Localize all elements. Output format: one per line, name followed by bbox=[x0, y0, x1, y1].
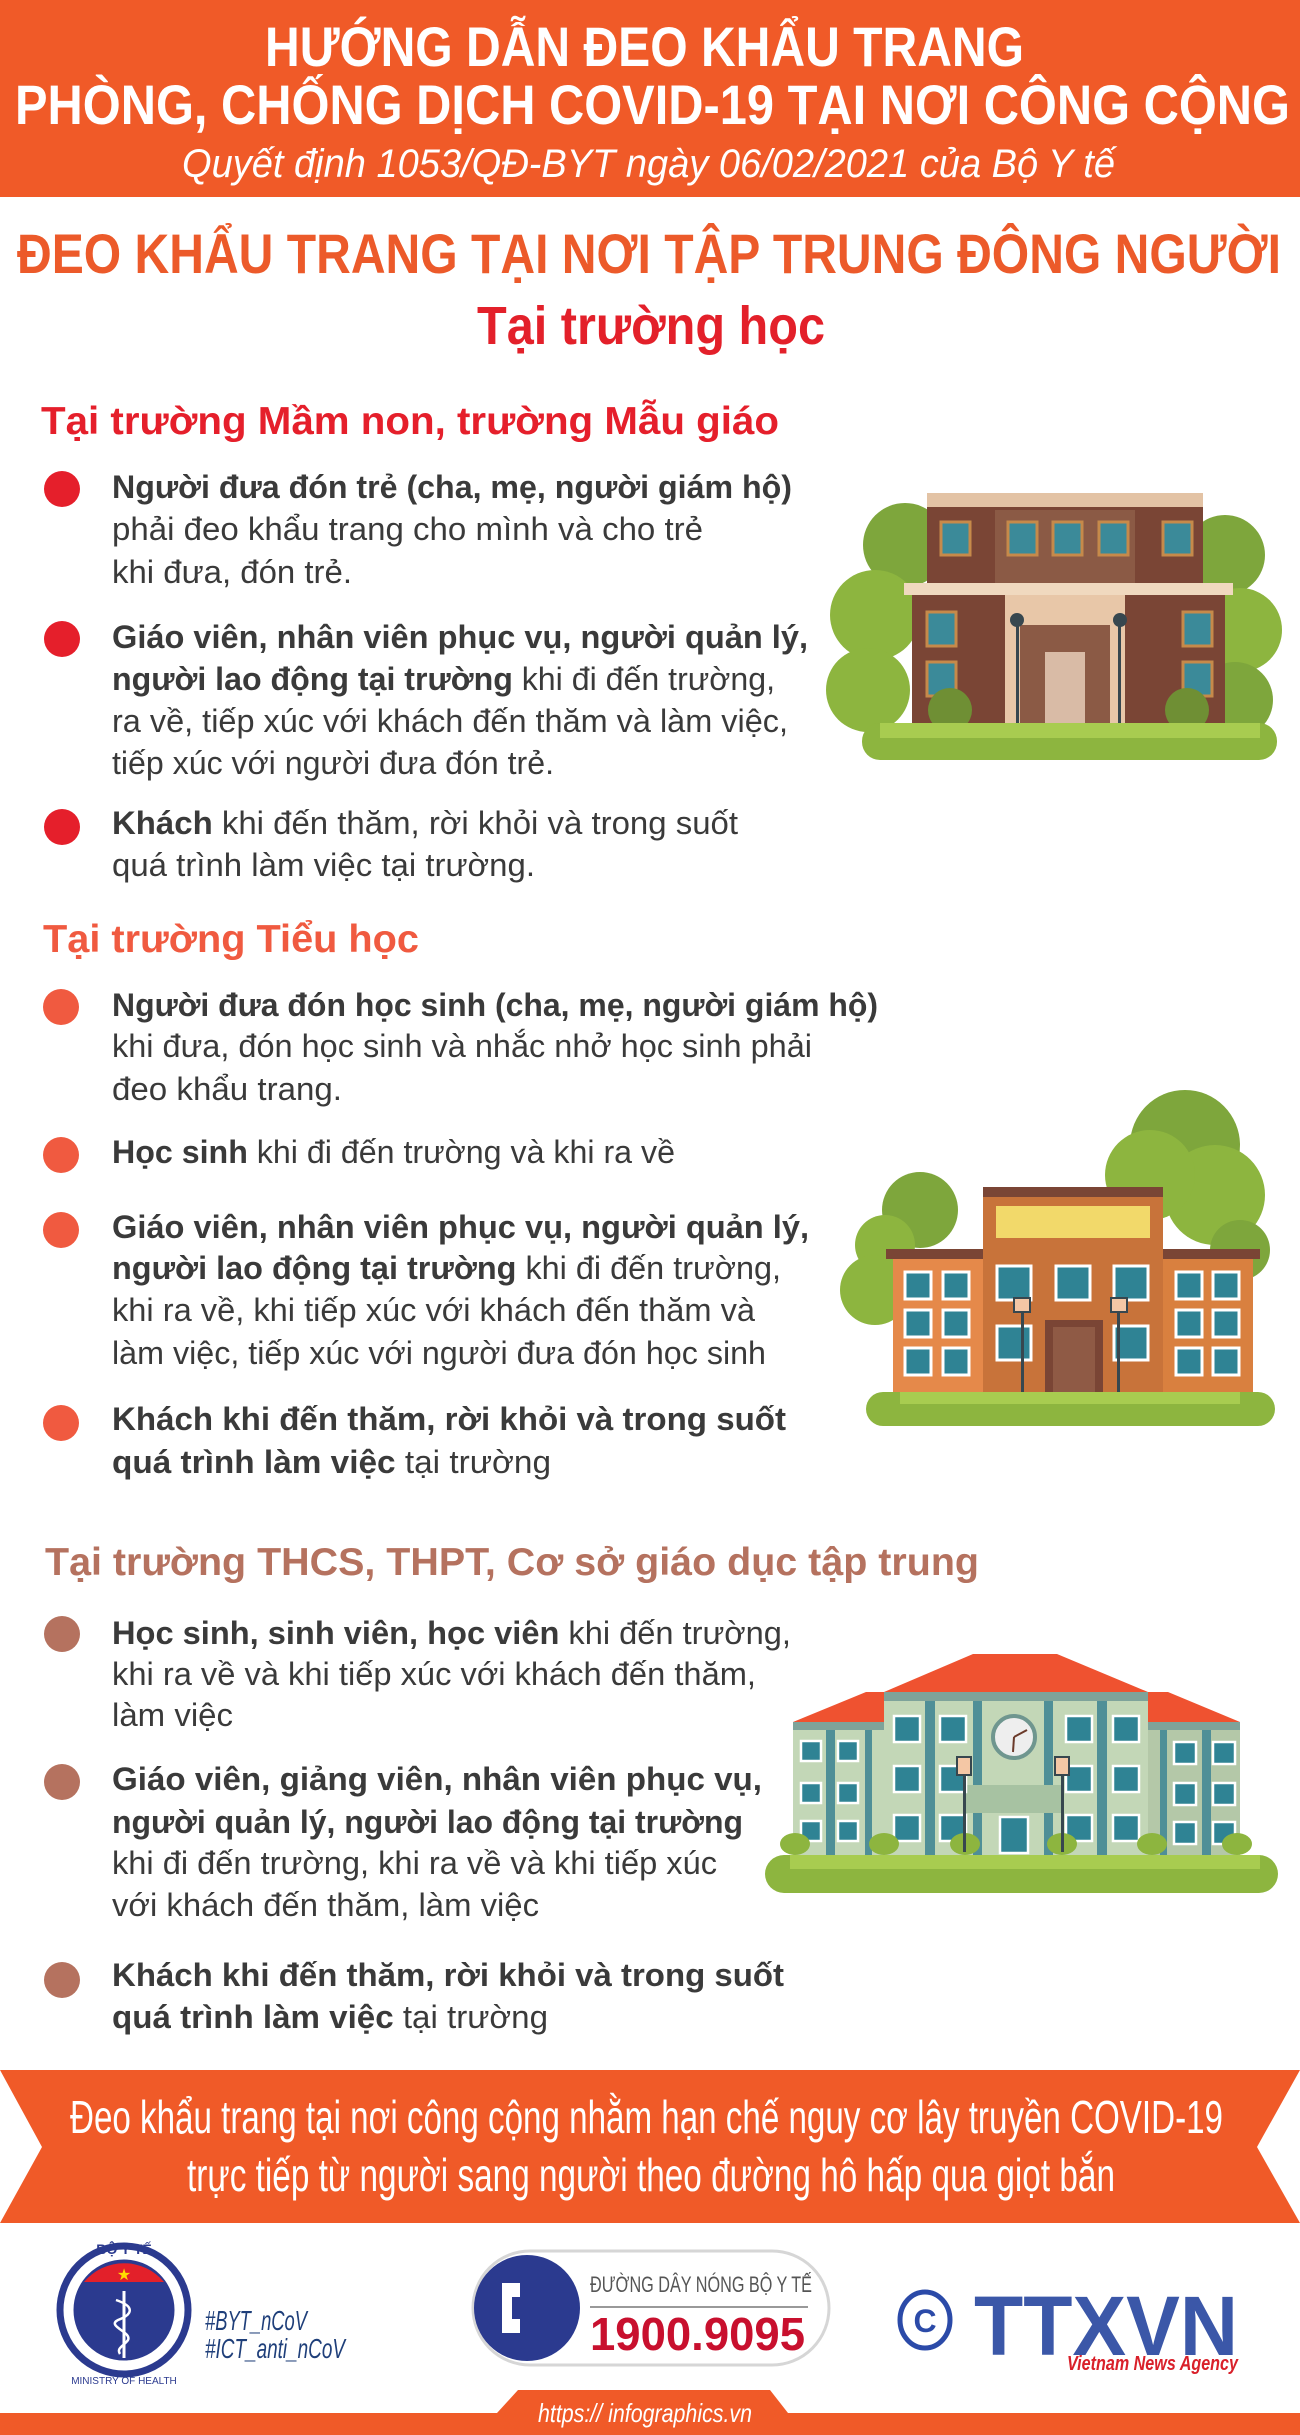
icon: ministry of health logo: MINISTRY OF HEALTH bbox=[71, 2376, 177, 2387]
icon: ministry of health logo: BỘ Y TẾ bbox=[96, 2240, 152, 2257]
bullet 1.3 bbox=[44, 805, 738, 883]
bullet 3.2: Giáo viên, giảng viên, nhân viên phục vụ, bbox=[112, 1761, 762, 1797]
subtitle: Quyết định 1053/QĐ-BYT ngày 06/02/2021 của Bộ Y tế bbox=[182, 142, 1118, 186]
footer bar: https:// infographics.vn bbox=[538, 2398, 752, 2428]
icon: clock bbox=[993, 1716, 1035, 1758]
bullet 2.1: Người đưa đón học sinh (cha, mẹ, người giám hộ) bbox=[112, 987, 878, 1023]
bullet 2.3: khi ra về, khi tiếp xúc với khách đến thăm và bbox=[112, 1292, 755, 1328]
footer bar bbox=[0, 2390, 1300, 2435]
icon: ministry of health logo bbox=[60, 2240, 188, 2387]
header banner bbox=[0, 0, 1300, 197]
bullet 1.2 bbox=[44, 619, 808, 781]
bullet 3.2: người quản lý, người lao động tại trường bbox=[112, 1804, 743, 1840]
hotline bbox=[473, 2251, 829, 2365]
bullet 3.3: Khách khi đến thăm, rời khỏi và trong suốt bbox=[112, 1957, 784, 1993]
logo: TTXVN: Vietnam News Agency bbox=[1067, 2353, 1239, 2375]
bullet 1.3: quá trình làm việc tại trường. bbox=[112, 847, 535, 883]
sub heading: Tại trường học bbox=[477, 296, 825, 356]
hotline: 1900.9095 bbox=[590, 2308, 805, 2360]
bullet 1.2: Giáo viên, nhân viên phục vụ, người quản lý, bbox=[112, 619, 808, 655]
bullet 2.3: người lao động tại trường khi đi đến trường, bbox=[112, 1250, 781, 1286]
bullet 1.1: khi đưa, đón trẻ. bbox=[112, 554, 352, 590]
bullet 2.3: Giáo viên, nhân viên phục vụ, người quản lý, bbox=[112, 1209, 809, 1245]
bullet 3.1 bbox=[44, 1615, 791, 1733]
bullet 2.4: Khách khi đến thăm, rời khỏi và trong suốt bbox=[112, 1401, 786, 1437]
bullet 1.3: Khách khi đến thăm, rời khỏi và trong suốt bbox=[112, 805, 738, 841]
section heading 3: Tại trường THCS, THPT, Cơ sở giáo dục tập trung bbox=[45, 1541, 979, 1584]
bullet 2.1 bbox=[43, 987, 878, 1107]
bullet 2.4: quá trình làm việc tại trường bbox=[112, 1444, 551, 1480]
title: HƯỚNG DẪN ĐEO KHẨU TRANG bbox=[265, 15, 1024, 78]
title bbox=[15, 15, 1290, 136]
icon: primary school building bbox=[840, 1090, 1275, 1426]
bullet 3.1: Học sinh, sinh viên, học viên khi đến trường, bbox=[112, 1615, 791, 1651]
bullet 3.2: khi đi đến trường, khi ra về và khi tiếp xúc bbox=[112, 1845, 717, 1881]
bullet 2.3: làm việc, tiếp xúc với người đưa đón học sinh bbox=[112, 1335, 766, 1371]
hashtags: #BYT_nCoV bbox=[205, 2305, 309, 2336]
icon: ministry of health logo: ★ bbox=[117, 2267, 131, 2284]
bullet 3.2 bbox=[44, 1761, 762, 1923]
icon: phone bbox=[474, 2255, 580, 2361]
icon: secondary school building bbox=[765, 1654, 1278, 1893]
bullet 3.3: quá trình làm việc tại trường bbox=[112, 1999, 548, 2035]
bullet 3.3 bbox=[44, 1957, 784, 2035]
icon: kindergarten building bbox=[826, 493, 1282, 760]
section heading 2: Tại trường Tiểu học bbox=[43, 918, 419, 961]
bullet 1.1: phải đeo khẩu trang cho mình và cho trẻ bbox=[112, 511, 703, 547]
bullet 2.2: Học sinh khi đi đến trường và khi ra về bbox=[112, 1134, 675, 1170]
bullet 2.1: đeo khẩu trang. bbox=[112, 1071, 342, 1107]
bullet 3.1: khi ra về và khi tiếp xúc với khách đến thăm, bbox=[112, 1656, 756, 1692]
bullet 1.2: ra về, tiếp xúc với khách đến thăm và làm việc, bbox=[112, 703, 788, 739]
hashtags: #ICT_anti_nCoV bbox=[205, 2333, 347, 2364]
bullet 1.2: tiếp xúc với người đưa đón trẻ. bbox=[112, 745, 554, 781]
bullet 2.4 bbox=[43, 1401, 786, 1480]
bullet 2.3 bbox=[43, 1209, 809, 1371]
panel: THCS THPT bbox=[44, 1541, 979, 2035]
section heading 1: Tại trường Mầm non, trường Mẫu giáo bbox=[41, 399, 779, 443]
bullet 1.1 bbox=[44, 469, 792, 590]
bullet 3.2: với khách đến thăm, làm việc bbox=[112, 1887, 539, 1923]
bullet 3.1: làm việc bbox=[112, 1697, 233, 1733]
bullet 1.1: Người đưa đón trẻ (cha, mẹ, người giám hộ) bbox=[112, 469, 792, 505]
logo: TTXVN: TTXVN bbox=[974, 2279, 1238, 2373]
hashtags bbox=[205, 2305, 347, 2364]
hotline: ĐƯỜNG DÂY NÓNG BỘ Y TẾ bbox=[590, 2272, 812, 2297]
logo: TTXVN: C bbox=[913, 2303, 937, 2339]
bullet 2.1: khi đưa, đón học sinh và nhắc nhở học sinh phải bbox=[112, 1028, 812, 1064]
callout banner bbox=[0, 2070, 1300, 2223]
panel: mam non bbox=[41, 399, 808, 883]
bullet 1.2: người lao động tại trường khi đi đến trường, bbox=[112, 661, 775, 697]
panel: tieu hoc bbox=[43, 918, 878, 1480]
